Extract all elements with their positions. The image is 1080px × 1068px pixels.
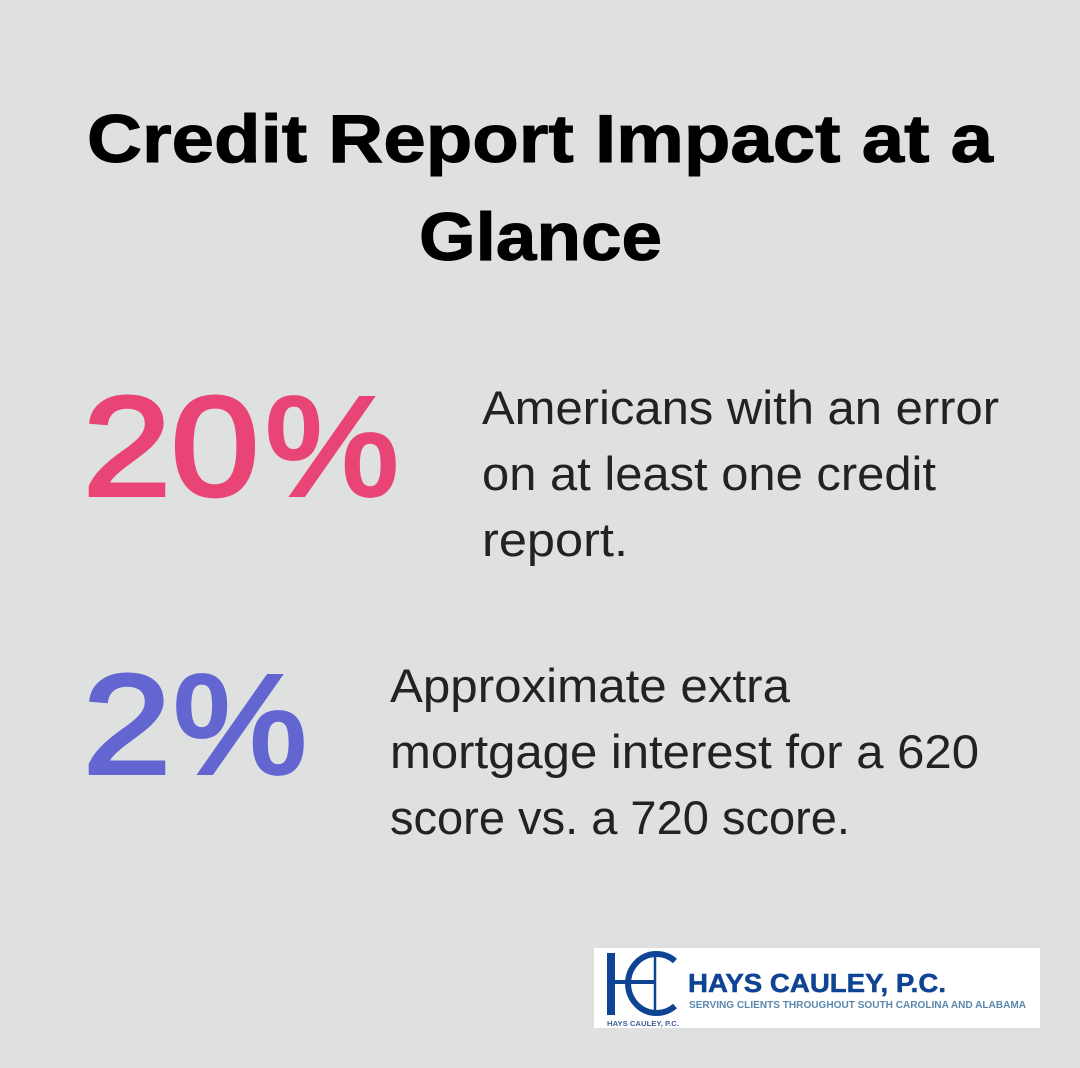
number: 2%: 2: [83, 645, 171, 803]
description: mortgage interest: Approximate extra: [390, 659, 791, 712]
description: mortgage interest: score vs. a 720 score.: [390, 791, 850, 844]
company name: HAYS CAULEY, P.C.: [688, 968, 946, 998]
title: Glance: [419, 199, 662, 275]
number: 20%: 20: [83, 367, 259, 525]
number: 20%: [83, 367, 399, 525]
logo: Hays Cauley, P.C.: [594, 948, 1040, 1028]
small logo caption: HAYS CAULEY, P.C.: [607, 1019, 679, 1028]
title: [87, 101, 994, 275]
icon: HC monogram: [607, 953, 675, 1015]
description: mortgage interest: [390, 659, 979, 844]
description: credit report errors: [482, 381, 999, 566]
description: credit report errors: report.: [482, 513, 628, 566]
stat: 20 percent: [83, 367, 999, 566]
tagline: SERVING CLIENTS THROUGHOUT SOUTH CAROLINA AND ALABAMA: [689, 999, 1026, 1011]
title: Credit Report Impact at a: [87, 101, 994, 177]
description: credit report errors: on at least one credit: [482, 447, 936, 500]
stat: 2 percent: [83, 645, 979, 844]
description: mortgage interest: mortgage interest for a 620: [390, 725, 979, 778]
number: 20%: %: [265, 367, 399, 525]
number: 2%: %: [173, 645, 307, 803]
number: 2%: [83, 645, 307, 803]
description: credit report errors: Americans with an error: [482, 381, 999, 434]
